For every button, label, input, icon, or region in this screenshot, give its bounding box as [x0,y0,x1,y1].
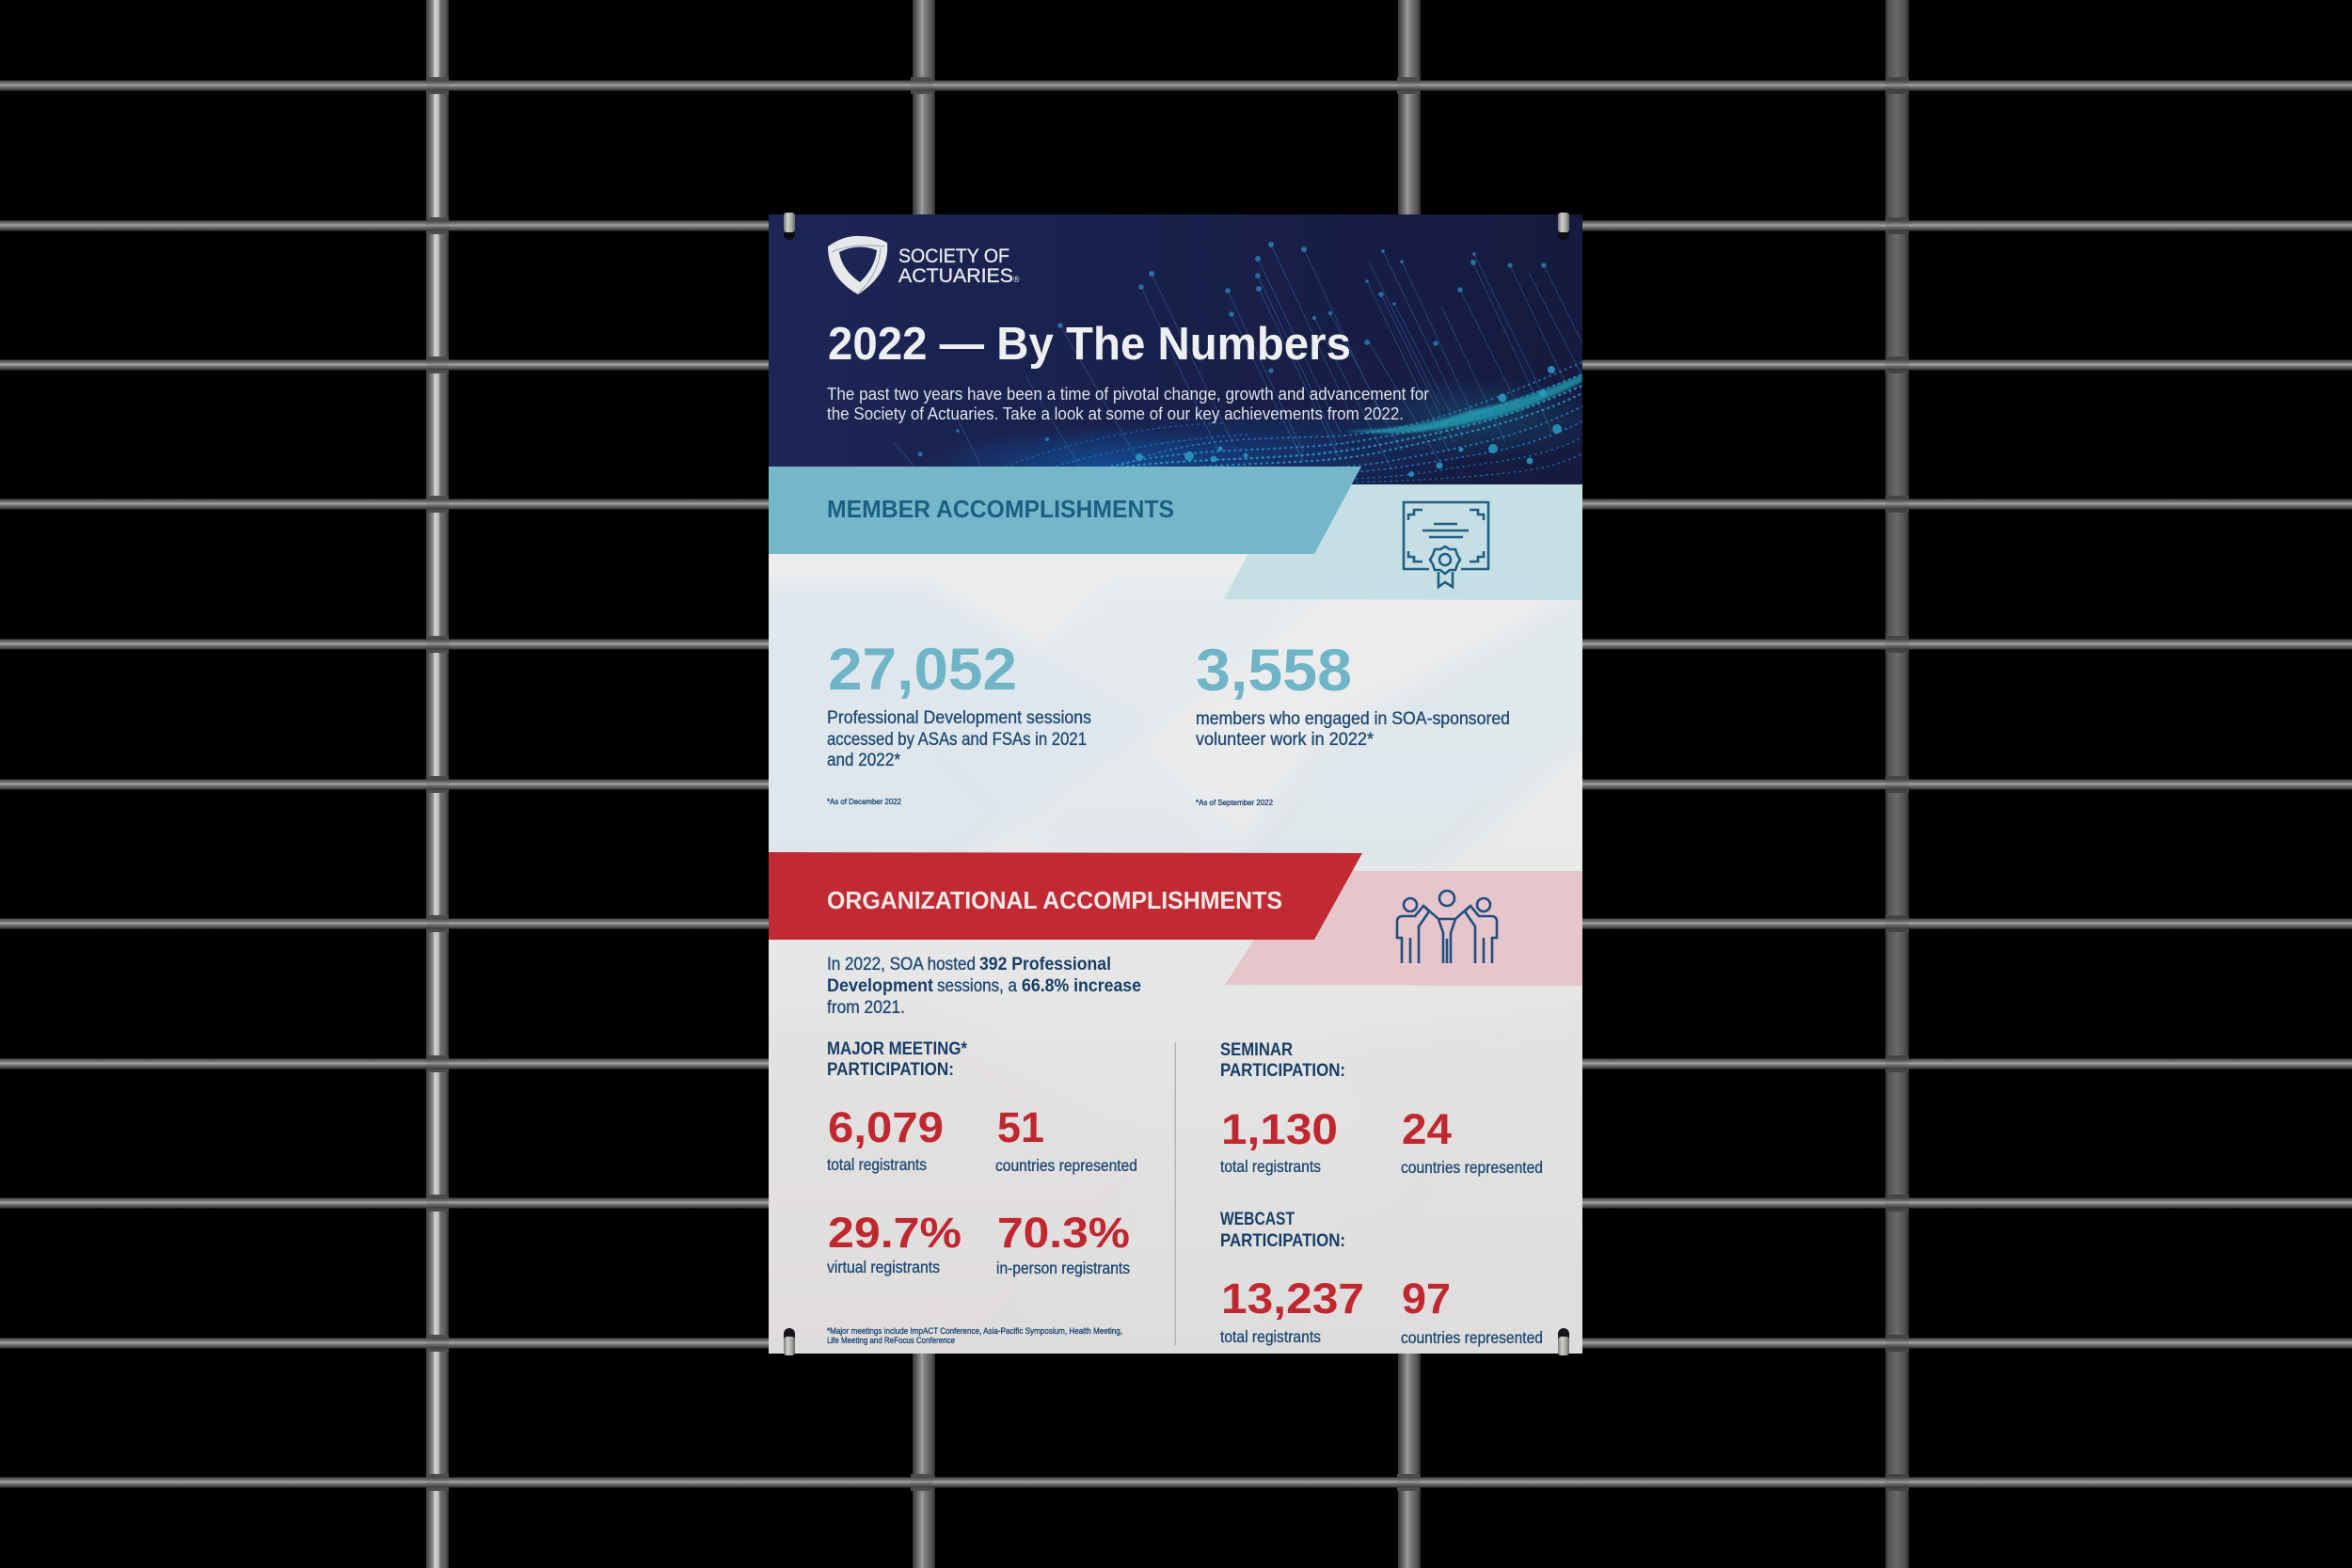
stat: 6,079 total registrants: 6,079 [828,1103,944,1151]
icon: certificate [1404,502,1488,587]
stat: 97 countries: 97 [1402,1275,1451,1323]
chevron background tints [769,586,1582,867]
stat: professional development sessions [827,637,1091,806]
stat: 1,130 total registrants: total registrants [1220,1157,1321,1176]
heading: webcast: PARTICIPATION: [1220,1230,1345,1251]
stat: 24 countries: countries represented [1401,1158,1543,1177]
stat: volunteer members: members who engaged in SOA-sponsored [1196,709,1510,729]
network graphic [894,242,1582,483]
heading: major meeting: MAJOR MEETING* [827,1038,967,1059]
intro text [827,384,1429,423]
stat: 24 countries: 24 [1402,1105,1452,1153]
heading: member accomplishments: MEMBER ACCOMPLISHMENTS [827,495,1174,523]
stat: 24 countries [1401,1105,1543,1177]
heading: major meeting: PARTICIPATION: [827,1059,954,1080]
text: sessions summary: 66.8% increase [1022,976,1141,996]
text: sessions summary: Development [827,976,934,996]
stat: volunteer members: *As of September 2022 [1196,798,1273,807]
pink back band [1225,871,1582,986]
stat: professional development sessions: Professional Development sessions [827,708,1091,728]
footnote: major meetings: Life Meeting and ReFocus Conference [827,1336,955,1346]
icon: shield logo [828,236,887,294]
icon: three people raising hands [1397,891,1497,963]
light teal back band [1224,484,1582,600]
stat: volunteer members [1196,638,1510,807]
heading: seminar: SEMINAR [1220,1039,1293,1060]
red heading band [769,852,1362,940]
text: sessions summary [827,955,1141,1018]
stat: professional development sessions: accessed by ASAs and FSAs in 2021 [827,730,1087,750]
text: sessions summary: from 2021. [827,998,905,1018]
panel: major meeting participation [827,1038,1137,1346]
heading: organizational accomplishments: ORGANIZATIONAL ACCOMPLISHMENTS [827,886,1282,914]
teal heading band [769,467,1361,554]
title: 2022 — By The Numbers [828,319,1351,370]
stat: 13,237 total registrants [1220,1275,1364,1346]
stat: 1,130 total registrants: 1,130 [1221,1105,1338,1153]
logo wordmark: SOCIETY OF [898,245,1009,267]
stat: 97 countries [1401,1275,1543,1347]
heading: seminar [1220,1039,1345,1081]
heading: major meeting [827,1038,967,1080]
stat: volunteer members: 3,558 [1196,638,1352,704]
stat: 6,079 total registrants [827,1103,944,1174]
poster [734,214,1618,1373]
stat: 29.7% virtual: 29.7% [828,1209,961,1257]
heading: seminar: PARTICIPATION: [1220,1060,1345,1081]
heading: webcast [1220,1209,1345,1251]
logo wordmark [898,245,1020,287]
panel: organizational accomplishments banner [769,852,1582,986]
stat: 13,237 total registrants: 13,237 [1221,1275,1364,1323]
heading: webcast: WEBCAST [1220,1209,1295,1229]
logo wordmark: ACTUARIES [898,265,1013,287]
stat: 1,130 total registrants [1220,1105,1338,1176]
text: sessions summary: In 2022, SOA hosted [827,955,976,974]
stat: 97 countries: countries represented [1401,1328,1543,1347]
stat: 29.7% virtual: virtual registrants [827,1258,940,1276]
text: sessions summary: 392 Professional [979,955,1111,974]
stat: professional development sessions: 27,052 [828,637,1017,703]
stat: 70.3% in-person: 70.3% [997,1209,1130,1257]
panel: member stats [827,637,1510,807]
stat: professional development sessions: *As of December 2022 [827,797,901,806]
text: sessions summary: sessions, a [937,976,1017,996]
stat: professional development sessions: and 2022* [827,751,901,770]
stat: 6,079 total registrants: total registrants [827,1155,927,1174]
panel: member accomplishments banner [769,467,1582,600]
intro text: the Society of Actuaries. Take a look at some of our key achievements from 2022. [827,404,1404,423]
stat: 13,237 total registrants: total registrants [1220,1327,1321,1346]
header panel [769,214,1582,484]
divider [1174,1042,1176,1345]
poster paper background [769,214,1582,1354]
footnote: major meetings [827,1326,1122,1346]
intro text: The past two years have been a time of pivotal change, growth and advancement for [827,384,1429,404]
stat: 70.3% in-person [996,1209,1130,1277]
stat: volunteer members: volunteer work in 2022* [1196,730,1375,750]
logo wordmark: ® [1013,275,1020,284]
stat: 51 countries [995,1103,1137,1175]
panel: webcast participation [1220,1209,1543,1347]
panel: seminar participation [1220,1039,1543,1177]
stat: 29.7% virtual [827,1209,961,1276]
stat: 51 countries: countries represented [995,1156,1137,1175]
footnote: major meetings: *Major meetings include ImpACT Conference, Asia-Pacific Symposium, Health Meeting, [827,1326,1122,1337]
stat: 51 countries: 51 [997,1103,1044,1151]
poster clips [784,213,1569,1355]
stat: 70.3% in-person: in-person registrants [996,1259,1130,1277]
